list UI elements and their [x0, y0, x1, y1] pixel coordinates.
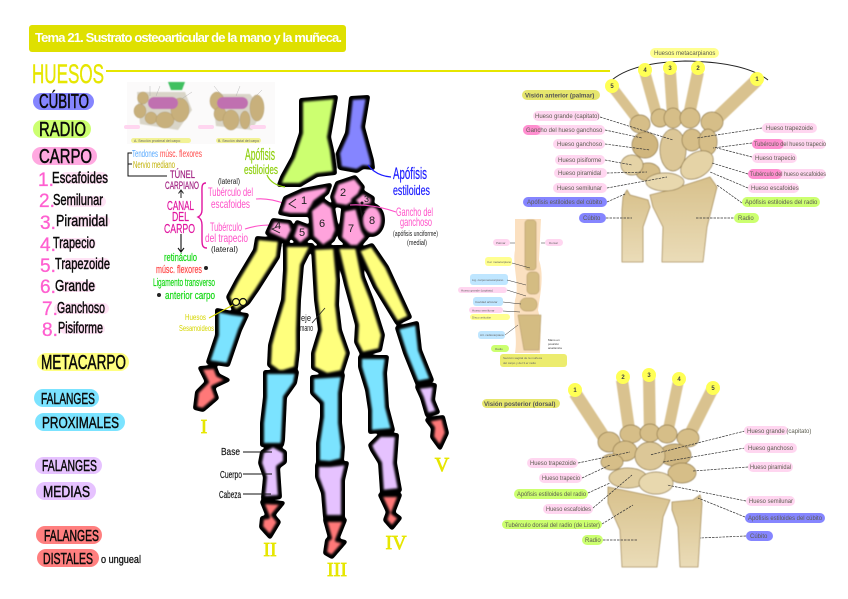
legend: ganchoso: [42, 299, 109, 320]
legend: trapezoide: Trapezoide: [55, 256, 110, 273]
label: hueso trapecio: [539, 473, 582, 483]
bones: [518, 220, 541, 350]
dorsal numbered circles: 2: [621, 375, 625, 381]
label: hueso escafoides: [543, 504, 593, 514]
roman numerals: [201, 416, 450, 581]
legend: piramidal: [40, 213, 110, 234]
note: retinaculo: retináculo: [164, 252, 197, 264]
roman numerals: II: [263, 539, 277, 561]
caption: [500, 354, 567, 367]
sesamoid bones: [232, 298, 246, 306]
legend: metacarpo: [37, 352, 129, 374]
palmar arc: huesos metacarpianos: Huesos metacarpianos: [654, 51, 715, 57]
cross section captions: B. Sección distal del carpo: [218, 139, 259, 143]
palmar numbered circles: [605, 61, 764, 93]
label: hueso trapezoide: [762, 123, 817, 133]
label: apofisis estiloides cubito: [368, 164, 430, 198]
palmar labels: [522, 90, 827, 223]
label: gancho del ganchoso: (apófisis unciforme): [393, 231, 438, 238]
label: hueso semilunar: Hueso semilunar: [749, 499, 793, 505]
diagram: carpal tunnel notes: [128, 149, 286, 302]
bone: dorsal ulna: [672, 495, 702, 567]
label: cubito: [579, 213, 606, 223]
label: cubito: Cúbito: [583, 216, 601, 222]
label: hueso semilunar: [746, 496, 795, 506]
legend: falanges distales: o ungueal: [101, 554, 141, 566]
label: hueso ganchoso: [744, 443, 797, 453]
label: hueso trapezoide: [527, 458, 578, 468]
legend: pisiforme: Pisiforme: [58, 320, 103, 337]
legend: escafoides: [38, 170, 108, 191]
label: radio: Radio: [585, 538, 601, 544]
label: tuberculo escafoides: Tubérculo del hueso escafoides: [750, 172, 826, 178]
dorsal numbered circles: [568, 368, 720, 397]
legend: grande: Grande: [55, 278, 95, 295]
legend: falanges medias: [35, 457, 102, 501]
note: retinaculo: músc. flexores: [156, 264, 202, 276]
legend: piramidal: 3.: [40, 213, 56, 234]
label: hueso trapecio: [752, 153, 797, 163]
label: ligamento: Lig. carpometacarpiano: [472, 278, 504, 282]
palmar numbered circles: 1: [755, 77, 759, 83]
bone: palmar radius: [650, 177, 717, 262]
label: apofisis estiloides del cubito: Apófisis estiloides del cúbito: [748, 516, 823, 522]
legend: grande: [40, 277, 96, 298]
arrow: down: [178, 234, 184, 252]
label: palmar: Palmar: [496, 241, 506, 245]
label: tuberculo dorsal: Tubérculo dorsal del radio (de Lister): [505, 523, 600, 529]
legend: falanges medias: MEDIAS: [43, 484, 90, 501]
label: hueso piramidal: [748, 462, 793, 472]
label: hueso grande: Hueso grande (capitato): [461, 288, 493, 292]
illustration: palmar wrist: [613, 72, 757, 262]
carpal numbers: 1: [301, 195, 307, 207]
label: hueso semilunar: [553, 183, 607, 193]
bones: palmar carpus: [621, 108, 723, 191]
legend: falanges proximales: PROXIMALES: [42, 415, 119, 432]
label: apofisis estiloides del cubito: [745, 513, 825, 523]
legend: cubito: [33, 90, 94, 113]
legend: cubito: CÚBITO: [39, 90, 89, 113]
labels: base cuerpo cabeza: Base: [221, 447, 240, 458]
legend: piramidal: Piramidal: [56, 213, 108, 230]
label: hueso ganchoso: Hueso ganchoso: [748, 446, 794, 452]
bone: dorsal metacarpals: [575, 377, 712, 442]
illustration: hand skeleton: [195, 97, 447, 557]
note: tuberculo trapecio: (lateral): [211, 245, 238, 254]
dorsal numbered circles: 1: [573, 388, 577, 394]
label: hueso grande: Hueso grande (capitato): [535, 114, 599, 120]
legend: falanges distales: [36, 526, 141, 568]
legend: trapecio: 4.: [40, 235, 56, 256]
label: hueso pisiforme: Hueso pisiforme: [558, 158, 602, 164]
carpal numbers: 6: [319, 218, 325, 230]
label: hueso pisiforme: [555, 155, 605, 165]
label: hueso ganchoso: [553, 139, 605, 149]
legend: ganchoso: 7.: [42, 299, 58, 320]
note: tendones: [132, 149, 202, 160]
note: tuberculo trapecio: Tubérculo: [210, 220, 242, 234]
bone: dorsal radius: [608, 487, 670, 567]
legend: trapecio: [40, 235, 96, 256]
note: mano en posicion anatomica: Mano en: [548, 338, 560, 342]
label: hueso escafoides: [748, 183, 799, 193]
note: tuberculo escafoides: escafoides: [211, 197, 250, 211]
label: hueso trapezoide: Hueso trapezoide: [766, 126, 814, 132]
label: hueso escafoides: Hueso escafoides: [751, 186, 799, 192]
label: hueso piramidal: [554, 168, 607, 178]
label: hueso trapecio: Hueso trapecio: [542, 476, 581, 482]
note: tuberculo trapecio: del trapecio: [205, 231, 248, 245]
illustration: dorsal wrist: [575, 377, 712, 567]
legend: radio: RADIO: [39, 119, 86, 141]
note: tunel carpiano: [165, 168, 199, 192]
legend: metacarpo: METACARPO: [41, 352, 126, 374]
note: tunel carpiano: CARPIANO: [165, 180, 199, 192]
legend: falanges proximales: FALANGES: [41, 391, 95, 408]
legend: semilunar: [39, 191, 106, 212]
bone: cubito: [338, 97, 373, 171]
palmar numbered circles: 3: [668, 66, 672, 72]
carpal numbers: 2: [340, 187, 346, 199]
dorsal numbered circles: 5: [711, 386, 715, 392]
legend: semilunar: 2.: [39, 191, 55, 212]
note: retinaculo: Ligamento transverso: [153, 277, 215, 289]
note: tuberculo escafoides: [208, 177, 253, 211]
carpal numbers: [272, 187, 375, 239]
label: radio: Radio: [495, 347, 503, 351]
label: dorsal: Dorsal: [549, 241, 558, 245]
dorsal numbered circles: 3: [647, 373, 651, 379]
connector: tubercle lines: [245, 199, 286, 229]
note: retinaculo: anterior carpo: [165, 290, 215, 302]
label: cavidad articular: Cavidad articular: [475, 300, 498, 304]
legend: pisiforme: 8.: [42, 320, 58, 341]
dorsal leader lines: [578, 431, 748, 540]
palmar numbered circles: 2: [696, 66, 700, 72]
label: hueso grande: [744, 426, 811, 435]
label: disco articular: Disco articular: [472, 316, 491, 320]
note: nervio mediano: Nervio mediano: [133, 160, 175, 171]
label: hueso piramidal: Hueso piramidal: [558, 171, 601, 177]
sagittal labels: [458, 239, 567, 367]
labels: base cuerpo cabeza: [219, 447, 272, 501]
label: apofisis estiloides cubito: estiloides: [393, 182, 430, 198]
label: tuberculo trapecio: [752, 139, 827, 149]
labels: base cuerpo cabeza: Cabeza: [219, 490, 241, 501]
legend: grande: 6.: [40, 277, 56, 298]
label: apofisis estiloides del cubito: Apófisis estiloides del cúbito: [527, 200, 603, 206]
legend: escafoides: Escafoides: [52, 170, 108, 187]
label: tuberculo trapecio: Tubérculo del hueso trapecio: [754, 142, 827, 148]
label: apofisis estiloides radio: estiloides: [244, 162, 278, 177]
label: hueso trapecio: Hueso trapecio: [755, 156, 796, 162]
label: metacarpiano: 3.er metacarpiano: [487, 260, 512, 264]
label: huesos sesamoideos: Huesos: [185, 313, 206, 322]
note: tendones: Tendones: [132, 149, 158, 160]
label: apofisis estiloides del radio: [742, 197, 820, 207]
legend: falanges medias: FALANGES: [42, 458, 97, 475]
legend: escafoides: 1.: [38, 170, 54, 191]
title: [29, 25, 346, 52]
illustration: sagittal section: [458, 219, 567, 367]
roman numerals: III: [327, 559, 347, 581]
label: eje mano: eje: [301, 313, 311, 323]
cross section captions: A. Sección proximal del carpo: [134, 139, 180, 143]
label: radio: Radio: [738, 216, 754, 222]
proximal phalanges: [208, 310, 432, 463]
legend: semilunar: Semilunar: [53, 192, 103, 209]
label: eje mano: [300, 308, 325, 333]
roman numerals: V: [435, 454, 450, 476]
dorsal numbered circles: 4: [677, 377, 681, 383]
label: gancho del ganchoso: (medial): [407, 240, 427, 247]
bone: palmar metacarpals: [613, 72, 757, 126]
legend: trapecio: Trapecio: [53, 235, 95, 252]
carpal numbers: 4: [275, 220, 281, 232]
label: radio: [734, 213, 759, 223]
label: hueso escafoides: Hueso escafoides: [546, 507, 591, 513]
label: cubito: Cúbito: [750, 534, 768, 540]
palmar numbered circles: 4: [643, 68, 647, 74]
label: articulacion radiocarpiana: Art. radiocarpiana: [480, 333, 504, 337]
label: eje mano: mano: [300, 323, 313, 333]
label: huesos sesamoideos: Sesamoideos: [179, 324, 214, 333]
label: gancho del hueso ganchoso: [523, 125, 605, 135]
note: canal del carpo: DEL: [172, 209, 189, 224]
cross section: right: [210, 92, 264, 130]
label: hueso ganchoso: Hueso ganchoso: [557, 142, 603, 148]
label: apofisis estiloides del cubito: [523, 197, 607, 207]
brace: [198, 183, 207, 248]
legend: trapezoide: 5.: [40, 256, 56, 277]
label: apofisis estiloides radio: Apófisis: [245, 145, 275, 164]
palmar arc: huesos metacarpianos: [607, 48, 768, 85]
label: hueso grande: [533, 111, 600, 121]
note: mano en posicion anatomica: posición: [548, 342, 559, 346]
bones: dorsal carpus: [598, 424, 699, 494]
figure: carpal tunnel cross sections: [124, 82, 275, 144]
heading: vision posterior: Visión posterior (dorsal): [484, 401, 555, 408]
caption: Sección sagital de la muñeca: [503, 356, 542, 360]
note: canal del carpo: CANAL: [167, 198, 194, 213]
label: hueso trapezoide: Hueso trapezoide: [530, 461, 577, 467]
label: hueso semilunar: Hueso semilunar: [472, 308, 495, 312]
bone: palmar ulna: [622, 190, 650, 262]
label: hueso grande: Hueso grande (capitato): [747, 429, 811, 435]
note: tuberculo escafoides: (lateral): [218, 177, 240, 186]
label: apofisis estiloides cubito: Apófisis: [393, 164, 427, 183]
label: gancho del ganchoso: Gancho del: [396, 205, 433, 219]
bracket arrows: [128, 153, 167, 176]
carpal numbers: 8: [369, 215, 375, 227]
label: apofisis estiloides del radio: Apófisis estiloides del radio: [745, 200, 818, 206]
note: retinaculo: [153, 252, 215, 302]
note: tuberculo trapecio: [205, 220, 248, 254]
label: gancho del hueso ganchoso: Gancho del hueso ganchoso: [526, 128, 603, 134]
label: hueso semilunar: Hueso semilunar: [557, 186, 602, 192]
legend: falanges distales: FALANGES: [44, 528, 99, 545]
palmar leader lines: [600, 117, 762, 218]
label: gancho del ganchoso: ganchoso: [400, 215, 432, 229]
bone: radio: [279, 97, 336, 185]
label: tuberculo escafoides: [748, 169, 826, 179]
legend: ganchoso: Ganchoso: [57, 300, 105, 317]
note: mano en posicion anatomica: [548, 338, 562, 350]
note: tuberculo escafoides: Tubérculo del: [208, 185, 253, 199]
carpal numbers: 3: [364, 194, 369, 204]
note: canal del carpo: [164, 198, 195, 236]
label: tuberculo dorsal: [502, 520, 602, 529]
label: gancho del ganchoso: [350, 205, 438, 247]
arrow: up: [178, 190, 184, 198]
metacarpal bones: [228, 238, 410, 375]
cross section captions: [124, 86, 266, 143]
roman numerals: IV: [385, 532, 407, 554]
carpal bones: [267, 177, 383, 247]
carpal numbers: 5: [299, 227, 305, 239]
label: hueso piramidal: Hueso piramidal: [750, 465, 791, 471]
label: apofisis estiloides del radio: [514, 489, 588, 499]
legend: falanges distales: DISTALES: [43, 551, 93, 568]
title: Tema 21. Sustrato osteoarticular de la mano y la muñeca.: [35, 30, 342, 45]
note: tendones: músc. flexores: [160, 149, 202, 160]
label: apofisis estiloides radio: [244, 145, 285, 187]
legend: pisiforme: [42, 320, 105, 341]
note: canal del carpo: CARPO: [164, 221, 195, 236]
leader lines: [503, 243, 545, 335]
label: apofisis estiloides del radio: Apófisis estiloides del radio: [517, 492, 587, 498]
middle phalanges: [260, 385, 438, 517]
caption: del carpo y del 3.er radio: [503, 361, 536, 365]
label: huesos sesamoideos: [179, 305, 233, 333]
label: radio: [582, 535, 603, 545]
cross section: left: [134, 82, 192, 130]
label: cubito: [746, 531, 773, 541]
distal phalanges: [195, 367, 447, 557]
note: mano en posicion anatomica: anatómica: [548, 346, 562, 350]
roman numerals: I: [201, 416, 207, 438]
legend: bone list: [32, 90, 141, 568]
carpal numbers: 7: [348, 223, 354, 235]
heading: huesos: HUESOS: [32, 59, 104, 89]
palmar numbered circles: 5: [610, 84, 614, 90]
skin outline: [514, 219, 542, 353]
heading: vision anterior: Visión anterior (palmar): [525, 92, 594, 100]
labels: base cuerpo cabeza: Cuerpo: [220, 470, 242, 481]
legend: trapezoide: [40, 256, 110, 277]
note: tunel carpiano: TÚNEL: [170, 168, 195, 181]
heading: vision anterior: [522, 90, 600, 100]
legend: falanges proximales: [34, 389, 125, 432]
dorsal labels: [482, 399, 825, 545]
legend: carpo: CARPO: [39, 146, 92, 168]
